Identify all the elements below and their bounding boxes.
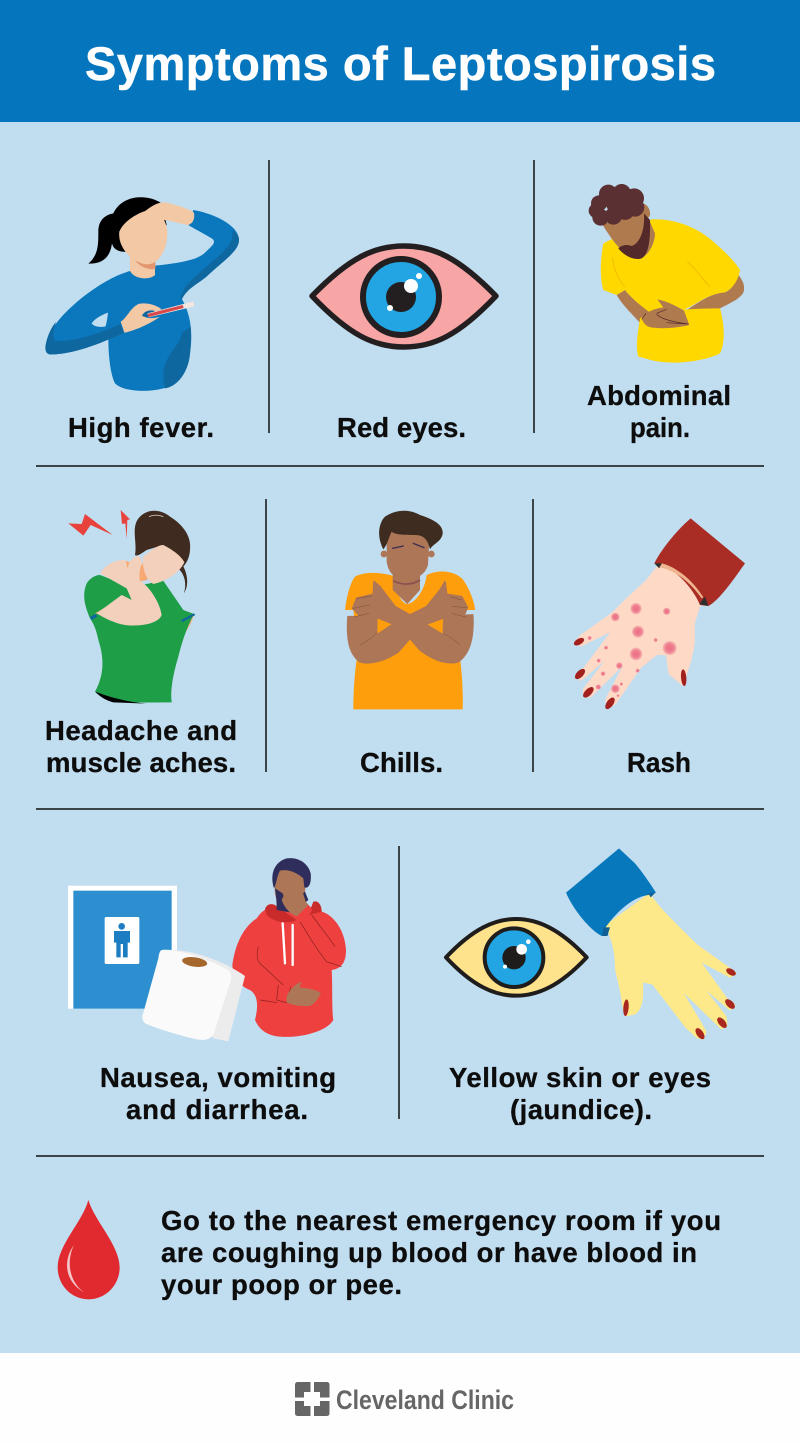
label: nausea, vomiting and diarrhea: and diarrhea. — [126, 1094, 308, 1125]
label: yellow skin or eyes — [449, 1062, 711, 1125]
panel: yellow skin or eyes — [446, 848, 737, 1125]
label: abdominal pain: Abdominal — [587, 380, 731, 411]
label: red eyes: Red eyes. — [337, 412, 466, 443]
panel: nausea, vomiting and diarrhea — [68, 858, 346, 1125]
panel: red eyes — [312, 246, 496, 443]
icon: curly hair — [589, 184, 644, 226]
panel: high fever — [45, 197, 239, 443]
icon: woman holding neck — [68, 510, 195, 704]
title: Symptoms of Leptospirosis — [85, 37, 716, 90]
icon: Cleveland Clinic logo — [295, 1382, 330, 1416]
label: yellow skin or eyes: Yellow skin or eyes — [449, 1062, 711, 1093]
footer — [0, 1353, 800, 1443]
label: rash: Rash — [627, 747, 691, 778]
icon: hand with rash — [573, 518, 745, 711]
icon: bathroom door — [68, 886, 177, 1009]
label: yellow skin or eyes: (jaundice). — [510, 1094, 652, 1125]
label: nausea, vomiting and diarrhea — [100, 1062, 336, 1125]
icon: red eye — [312, 246, 496, 347]
text: emergency advice: your poop or pee. — [161, 1269, 402, 1300]
text: emergency advice: Go to the nearest emergency room if you — [161, 1205, 721, 1236]
icon: yellow eye and hand — [446, 848, 737, 1041]
icon: person hugging self — [345, 511, 475, 709]
text: emergency advice — [161, 1205, 721, 1300]
panel: emergency warning — [58, 1200, 721, 1300]
panel: chills — [345, 511, 475, 778]
icon: yellow eye — [446, 919, 587, 996]
icon: man in red hoodie — [232, 858, 346, 1037]
label: abdominal pain — [587, 380, 731, 443]
panel: rash — [573, 518, 745, 778]
text: emergency advice: are coughing up blood or have blood in — [161, 1237, 697, 1268]
label: abdominal pain: pain. — [630, 412, 690, 443]
icon: blood drop — [58, 1200, 120, 1299]
panel: abdominal pain — [587, 184, 744, 443]
icon: door, toilet roll and man — [68, 858, 346, 1041]
icon: yellow hand — [566, 848, 737, 1041]
label: chills: Chills. — [360, 747, 443, 778]
label: headache and muscle aches — [45, 715, 237, 778]
icon: woman with thermometer — [45, 197, 239, 391]
label: nausea, vomiting and diarrhea: Nausea, vomiting — [100, 1062, 336, 1093]
label: headache and muscle aches: Headache and — [45, 715, 237, 746]
logo text: Cleveland Clinic — [336, 1385, 514, 1415]
icon: man holding stomach — [589, 184, 744, 363]
icon: toilet roll — [142, 950, 245, 1041]
label: headache and muscle aches: muscle aches. — [46, 747, 236, 778]
label: high fever: High fever. — [68, 412, 214, 443]
header banner — [0, 0, 800, 122]
panel: headache and muscle aches — [45, 510, 237, 778]
